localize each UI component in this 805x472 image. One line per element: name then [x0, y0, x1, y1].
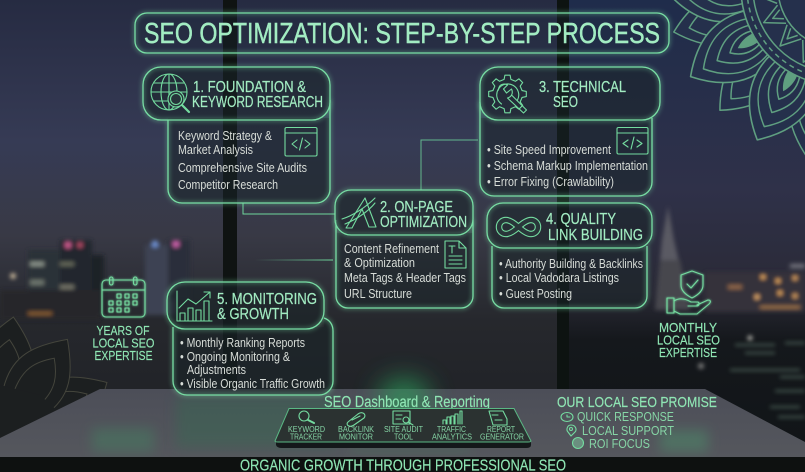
dashboard heading: SEO Dashboard & Reporting — [324, 394, 490, 411]
panel: 5 monitoring and growth: • Visible Organic Traffic Growth — [180, 377, 325, 391]
callout: monthly local seo expertise: MONTHLY — [659, 320, 717, 335]
panel: 2 on-page optimization: OPTIMIZATION — [380, 214, 467, 231]
panel: 1 foundation and keyword research: KEYWORD RESEARCH — [192, 94, 323, 111]
panel: 1 foundation and keyword research: Market Analysis — [178, 143, 253, 157]
icon: calendar — [102, 277, 145, 317]
our local seo promise: LOCAL SUPPORT — [582, 423, 674, 438]
dashboard device: TRACKER — [290, 432, 322, 442]
icon: code window — [285, 128, 317, 156]
panel: 4 quality link building: • Guest Posting — [499, 287, 572, 301]
icon: gear with wrench — [489, 75, 526, 113]
title — [135, 13, 669, 53]
icon: stylised A with pen — [342, 198, 376, 228]
connector lines — [243, 140, 478, 385]
icon: keyword tracker — [299, 411, 314, 423]
icon: site audit tool — [393, 411, 413, 425]
decorative mandala: bottom left — [0, 312, 122, 445]
our local seo promise: ROI FOCUS — [589, 436, 650, 451]
panel: 2 on-page optimization: Meta Tags & Header Tags — [344, 271, 466, 285]
panel: 2 on-page optimization: & Optimization — [344, 256, 415, 270]
dashboard device: TRAFFIC — [437, 425, 466, 434]
icon: report generator — [489, 411, 507, 425]
panel: 3 technical seo: SEO — [553, 94, 578, 111]
panel: 3 technical seo: • Error Fixing (Crawlability) — [487, 175, 614, 189]
callout: monthly local seo expertise: LOCAL SEO — [657, 332, 720, 348]
icon: infinity — [499, 220, 538, 234]
panel: 5 monitoring and growth: • Ongoing Monitoring & — [180, 350, 291, 364]
dashboard device: KEYWORD — [288, 425, 325, 434]
panel: 3 technical seo: 3. TECHNICAL — [539, 79, 626, 96]
callout: monthly local seo expertise: EXPERTISE — [659, 345, 717, 360]
panel: 2 on-page optimization: URL Structure — [344, 287, 412, 301]
panel: 3 technical seo: • Schema Markup Implementation — [487, 159, 648, 173]
callout: years of local seo expertise: EXPERTISE — [94, 348, 153, 363]
panel: 4 quality link building: • Authority Building & Backlinks — [499, 257, 643, 271]
icon: traffic analytics — [443, 411, 462, 424]
icon: clock — [561, 412, 573, 422]
dashboard device: REPORT — [487, 425, 515, 434]
dashboard device — [275, 408, 531, 448]
dashboard device: TOOL — [394, 432, 413, 442]
panel: 5 monitoring and growth: • Monthly Ranking Reports — [180, 336, 305, 350]
our local seo promise: OUR LOCAL SEO PROMISE — [557, 394, 717, 411]
icon: globe with magnifier — [151, 74, 189, 112]
panel: 4 quality link building — [487, 203, 652, 308]
title: SEO OPTIMIZATION: STEP-BY-STEP PROCESS — [144, 18, 660, 50]
dashboard device: SITE AUDIT — [384, 425, 423, 434]
panel: 3 technical seo — [480, 67, 660, 196]
icon: code window — [617, 128, 648, 154]
panel: 5 monitoring and growth — [167, 282, 333, 395]
callout: monthly local seo expertise — [657, 271, 720, 360]
callout: years of local seo expertise: LOCAL SEO — [92, 336, 154, 350]
dashboard device: ANALYTICS — [432, 432, 472, 442]
panel: 4 quality link building: • Local Vadodara Listings — [499, 271, 619, 285]
decorative mandala: top right — [665, 0, 805, 161]
panel: 3 technical seo: • Site Speed Improvement — [487, 143, 611, 157]
window pillars — [223, 0, 569, 392]
dashboard device: MONITOR — [339, 432, 373, 442]
panel: 1 foundation and keyword research: Keyword Strategy & — [178, 129, 273, 143]
callout: years of local seo expertise — [92, 277, 154, 363]
icon: growth chart — [177, 291, 212, 321]
panel: 1 foundation and keyword research: 1. FOUNDATION & — [193, 79, 306, 96]
panel: 4 quality link building: LINK BUILDING — [548, 227, 643, 244]
footer bar — [0, 457, 805, 472]
our local seo promise — [557, 394, 717, 451]
panel: 2 on-page optimization — [335, 190, 473, 308]
dashboard device: GENERATOR — [480, 432, 524, 442]
dashboard device: BACKLINK — [338, 425, 375, 434]
panel: 5 monitoring and growth: & GROWTH — [217, 306, 289, 323]
panel: 1 foundation and keyword research: Comprehensive Site Audits — [178, 161, 307, 175]
panel: 2 on-page optimization: Content Refinement — [344, 242, 439, 256]
our local seo promise: QUICK RESPONSE — [577, 409, 674, 424]
callout: years of local seo expertise: YEARS OF — [96, 323, 150, 338]
table surface — [0, 378, 805, 457]
panel: 1 foundation and keyword research — [143, 67, 330, 203]
panel: 1 foundation and keyword research: Competitor Research — [178, 178, 278, 192]
icon: backlink monitor — [347, 413, 365, 426]
panel: 2 on-page optimization: 2. ON-PAGE — [380, 199, 453, 216]
icon: roi coin — [572, 438, 584, 448]
panel: 4 quality link building: 4. QUALITY — [546, 211, 616, 228]
panel: 5 monitoring and growth: Adjustments — [187, 363, 246, 377]
panel: 5 monitoring and growth: 5. MONITORING — [217, 291, 317, 308]
icon: shield on open hand — [667, 271, 710, 314]
icon: location pin — [567, 425, 576, 436]
icon: document — [445, 241, 466, 268]
